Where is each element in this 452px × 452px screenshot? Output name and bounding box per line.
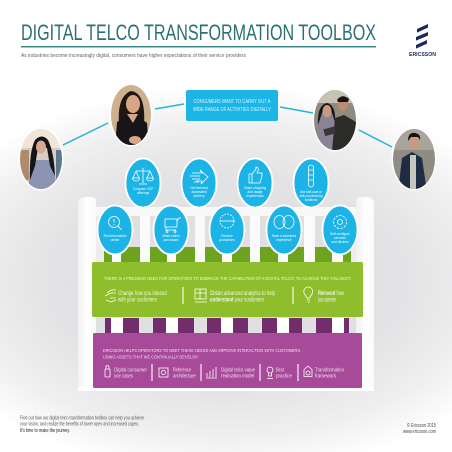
icon: analytics dashboard (195, 289, 207, 302)
slats lower (111, 318, 344, 334)
text: value model: realisation model (221, 374, 254, 380)
text: value model (221, 368, 255, 380)
text: best practice: practice (276, 374, 292, 380)
activity: make online purchases: Make online (162, 234, 180, 238)
text: change how you interact (117, 291, 167, 304)
green stripes (104, 247, 351, 263)
activity: get fast delivery (182, 158, 216, 208)
shelf (78, 197, 374, 391)
activity: find information (98, 206, 132, 254)
footer text (20, 416, 144, 434)
footer text: It's time to make the journey. (20, 428, 70, 434)
panel: consumer activities (98, 158, 358, 254)
activity: seamless experience: experience (276, 238, 292, 242)
icon: best practice (267, 367, 273, 378)
logo: Ericsson (409, 24, 436, 58)
heading: purple: USING ASSETS THAT WE CONTINUALLY DEVELOP: (103, 354, 199, 360)
activity: self-configure (322, 206, 358, 254)
text: use cases: use cases (114, 374, 133, 380)
icon: hands (105, 290, 116, 302)
activity: find information: online (111, 238, 119, 242)
heading: purple (103, 348, 301, 360)
crossbar (94, 207, 359, 216)
activity: receive promotions (210, 206, 244, 254)
activity: self-configure: and devices (331, 240, 349, 244)
photo: woman with long hair (18, 129, 64, 190)
icon: value model (206, 367, 217, 378)
text: transformation framework: framework (315, 374, 336, 380)
text: best practice: Best (276, 368, 284, 374)
activity: seamless experience (266, 206, 302, 254)
panel: purple assets (93, 333, 362, 388)
text: transformation framework (315, 368, 344, 380)
activity: self-care (294, 158, 328, 208)
text: reinvent (318, 291, 344, 304)
text: use cases (114, 368, 147, 380)
text: analytics: Obtain advanced analytics to help (210, 291, 275, 297)
slats upper (112, 216, 343, 263)
callout: WIDE RANGE OF ACTIVITIES DIGITALLY (193, 107, 271, 113)
text: analytics (210, 291, 275, 304)
text: change how you interact: Change how you interact (118, 291, 167, 297)
activity: compare CSP offerings: Compare CSP (133, 187, 153, 191)
heading: purple: ERICSSON HELPS OPERATORS TO MEET THESE NEEDS AND IMPROVE INTERACTION WITH CUSTOMERS, (103, 348, 301, 354)
activity: compare CSP offerings: offerings (137, 191, 149, 195)
activity: share shopping (238, 158, 272, 208)
activity: seamless experience: Have a seamless (272, 234, 297, 238)
icon: lightbulb (304, 287, 313, 302)
activity: receive promotions: Receive (221, 234, 233, 238)
text: best practice (276, 368, 292, 380)
activity: self-care: solutions (305, 198, 318, 202)
activity: self-configure: Self-configure (330, 232, 350, 236)
icon: use cases (105, 366, 110, 377)
activity: share shopping: Share shopping (244, 186, 266, 190)
photo: smiling woman (110, 84, 152, 148)
text: reinvent: Reinvent how (318, 291, 344, 297)
activity: find information: Find information (104, 234, 127, 238)
left post (78, 197, 96, 391)
text: use cases: Digital consumer (114, 368, 147, 374)
text: reference architecture: Reference (173, 368, 191, 374)
activity: get fast delivery: delivery (194, 194, 205, 198)
activity: get fast delivery: Get fast and (190, 186, 208, 190)
callout: CONSUMERS WANT TO CARRY OUT A (194, 99, 271, 105)
text: transformation framework: Transformation (315, 368, 344, 374)
heading: green: THERE IS A PRESSING NEED FOR OPERATORS TO EMBRACE THE CAPABILITIES OF A DIGITAL TELCO, TO ACHIEVE THIS YOU MUST: (104, 276, 351, 282)
activity: compare CSP offerings (126, 158, 160, 208)
purple stripes (105, 318, 349, 334)
text: reference architecture: architecture (173, 374, 196, 380)
callout (186, 90, 278, 121)
subtitle: As industries become increasingly digital, consumers have higher expectations of their service providers (21, 53, 246, 59)
text: value model: Digital telco value (221, 368, 255, 374)
activity: self-care: Use self-care or (300, 190, 323, 194)
text: analytics: understand your customers (210, 298, 264, 304)
activity: get fast delivery: automated (191, 190, 207, 194)
activity: share shopping: experiences (246, 194, 264, 198)
connector lines (63, 104, 392, 147)
right post (356, 197, 374, 391)
copyright: © Ericsson 2015 (407, 422, 436, 429)
activity: make online purchases (154, 206, 188, 254)
activity: self-care: self-provisioning (299, 194, 323, 198)
footer text: Find out how our digital telco transformation toolbox can help you achieve (20, 416, 144, 422)
activity: make online purchases: purchases (164, 238, 179, 242)
copyright (403, 422, 436, 435)
panel: green needs (92, 262, 363, 317)
text: reference architecture (173, 368, 196, 380)
logo: Ericsson: ERICSSON (409, 52, 436, 58)
icon: reference architecture (159, 368, 168, 377)
activity: self-configure: services (334, 236, 346, 240)
activity: receive promotions: promotions (219, 238, 235, 242)
photo: man in dark jacket (392, 128, 436, 192)
photo: couple with tablet (312, 88, 358, 152)
copyright: www.ericsson.com (403, 429, 436, 435)
footer text: your vision, and realize the benefits of lower opex and increased capex. (20, 422, 139, 428)
activity: share shopping: and usage (248, 190, 263, 194)
icon: transformation framework (304, 366, 312, 376)
text: change how you interact: with your customers (117, 298, 157, 304)
text: reinvent: you operate (318, 298, 336, 304)
